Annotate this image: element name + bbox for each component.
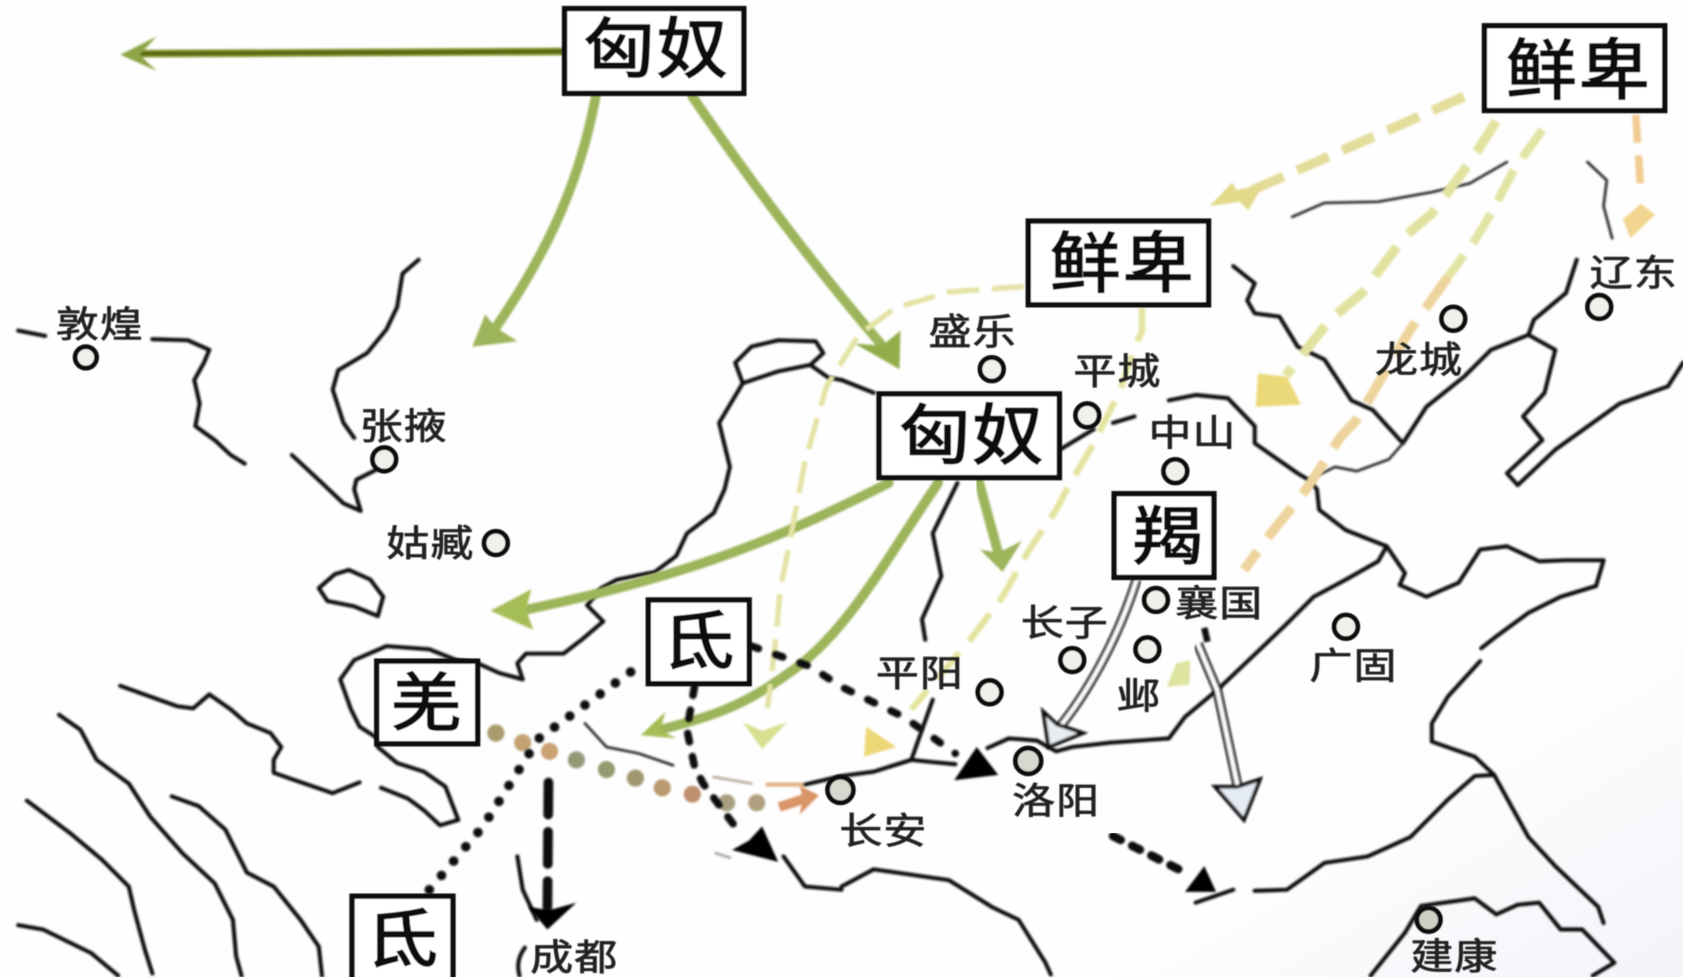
label box: Qiang xyxy=(377,661,478,744)
city labels: 洛阳 xyxy=(1012,781,1100,822)
city markers xyxy=(75,295,1611,932)
arrow: Xianbei middle south dashed xyxy=(864,308,1190,757)
arrow: Xiongnu to Guanzhong xyxy=(641,483,938,738)
arrow: Xiongnu south-east xyxy=(692,97,901,369)
city labels: 建康 xyxy=(1410,937,1498,977)
city labels: 长子 xyxy=(1021,603,1109,644)
label box: Di lower: 氐 xyxy=(367,905,438,976)
label box: Xiongnu middle: 匈奴 xyxy=(899,400,1045,473)
arrow: Xianbei to Liaodong dashed xyxy=(1623,115,1655,238)
city labels: 张掖 xyxy=(360,407,448,447)
label box: Qiang: 羌 xyxy=(391,669,462,740)
city labels: 盛乐 xyxy=(928,312,1016,353)
arrow: Di dashed east to Luoyang xyxy=(751,646,998,780)
city labels: 敦煌 xyxy=(56,305,144,345)
arrow: Xianbei long dashed to Xiangguo xyxy=(1244,130,1542,570)
label box: Jie xyxy=(1114,494,1214,577)
city labels: 平阳 xyxy=(876,654,964,694)
arrow: Xiongnu to west bend xyxy=(491,483,889,630)
arrow: Xianbei middle west dashed xyxy=(743,287,1024,749)
arrow: Jie double line to Luoyang xyxy=(1043,580,1137,747)
arrow: Xiongnu west xyxy=(120,36,564,71)
arrow: Di dotted route xyxy=(429,671,632,890)
label box: Di upper xyxy=(648,600,749,684)
label box: Xianbei top right xyxy=(1484,26,1665,111)
city labels: 长安 xyxy=(839,812,927,852)
city labels: 中山 xyxy=(1148,413,1236,454)
arrow: Xiongnu short south xyxy=(979,482,1022,572)
label box: Xianbei middle: 鲜卑 xyxy=(1050,228,1196,301)
arrow: Jie double line south xyxy=(1198,628,1260,820)
city labels: 辽东 xyxy=(1590,253,1678,294)
city labels: 龙城 xyxy=(1375,340,1463,381)
city labels: 姑臧 xyxy=(386,524,474,564)
arrow: Xiongnu south-west xyxy=(472,97,596,347)
arrow: Di dashed to Chengdu xyxy=(528,782,576,929)
arrow: Di dashed south to Hanzhong xyxy=(687,687,778,862)
city labels: 广固 xyxy=(1309,646,1397,687)
city labels: 邺 xyxy=(1117,676,1161,717)
arrow: Qiang dotted to Chang'an xyxy=(487,724,819,815)
city labels: 襄国 xyxy=(1175,584,1263,624)
arrow: dashed south-east toward Huai xyxy=(1113,836,1216,892)
arrow: Xianbei west dashed xyxy=(1210,97,1464,210)
city labels: 平城 xyxy=(1073,352,1161,392)
label box: Xianbei top right: 鲜卑 xyxy=(1506,35,1652,108)
arrow: Xianbei south-west dashed xyxy=(1256,121,1496,407)
label box: Xiongnu top: 匈奴 xyxy=(584,13,730,86)
city labels xyxy=(56,253,1678,977)
label box: Di upper: 氐 xyxy=(663,607,734,677)
label box: Di lower xyxy=(352,896,453,977)
label box: Jie: 羯 xyxy=(1132,502,1203,573)
